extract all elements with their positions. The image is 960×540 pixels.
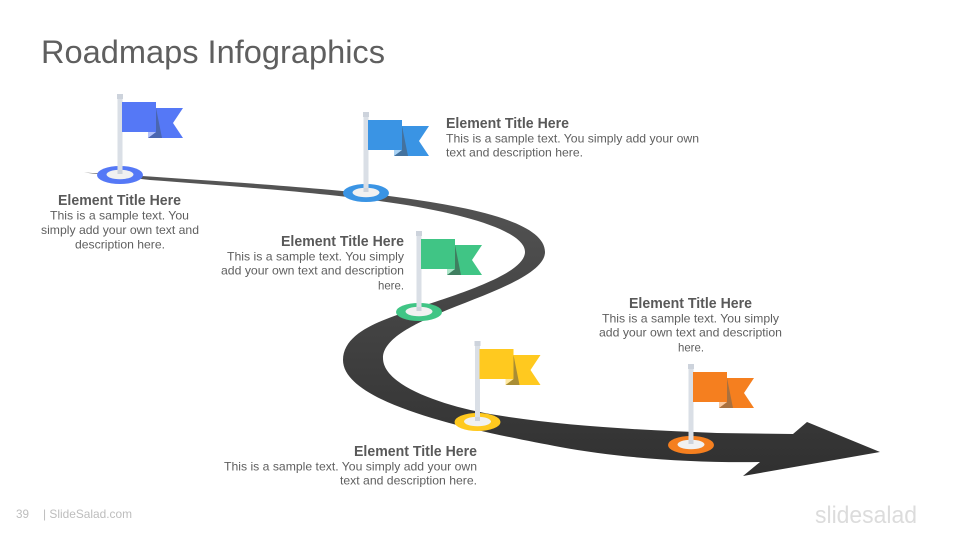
footer page number: 39: [16, 507, 29, 521]
text block 5: This is a sample text. You simply add your own: [224, 460, 477, 474]
road arrow: [84, 172, 880, 476]
flag marker 3: green: [396, 231, 482, 321]
text block 4: This is a sample text. You simply: [602, 312, 779, 326]
flag marker 2: light blue: [343, 112, 429, 202]
flag marker 4: yellow: [454, 341, 540, 431]
text block 1: description here.: [75, 238, 165, 252]
text block 1: Element Title Here: [58, 193, 181, 209]
title: Roadmaps Infographics: [41, 34, 385, 70]
footer site name: | SlideSalad.com: [43, 507, 132, 521]
text block 3: [221, 234, 404, 292]
flag marker 1: blue: [97, 94, 183, 184]
text block 4: [599, 296, 782, 354]
flag marker 5: orange: [668, 364, 754, 454]
text block 4: here.: [678, 340, 704, 354]
text block 1: [41, 193, 199, 252]
text block 4: add your own text and description: [599, 326, 782, 340]
text block 2: This is a sample text. You simply add your own: [446, 132, 699, 146]
footer logo: slidesalad: [815, 502, 917, 529]
text block 1: This is a sample text. You: [50, 208, 189, 222]
text block 5: [224, 444, 477, 488]
text block 2: Element Title Here: [446, 116, 569, 132]
text block 2: [446, 116, 699, 160]
text block 4: Element Title Here: [629, 296, 752, 312]
text block 1: simply add your own text and: [41, 223, 199, 237]
text block 3: Element Title Here: [281, 234, 404, 250]
text block 3: This is a sample text. You simply: [227, 250, 404, 264]
text block 5: text and description here.: [340, 474, 477, 488]
text block 3: here.: [378, 278, 404, 292]
text block 3: add your own text and description: [221, 264, 404, 278]
text block 5: Element Title Here: [354, 444, 477, 460]
text block 2: text and description here.: [446, 146, 583, 160]
